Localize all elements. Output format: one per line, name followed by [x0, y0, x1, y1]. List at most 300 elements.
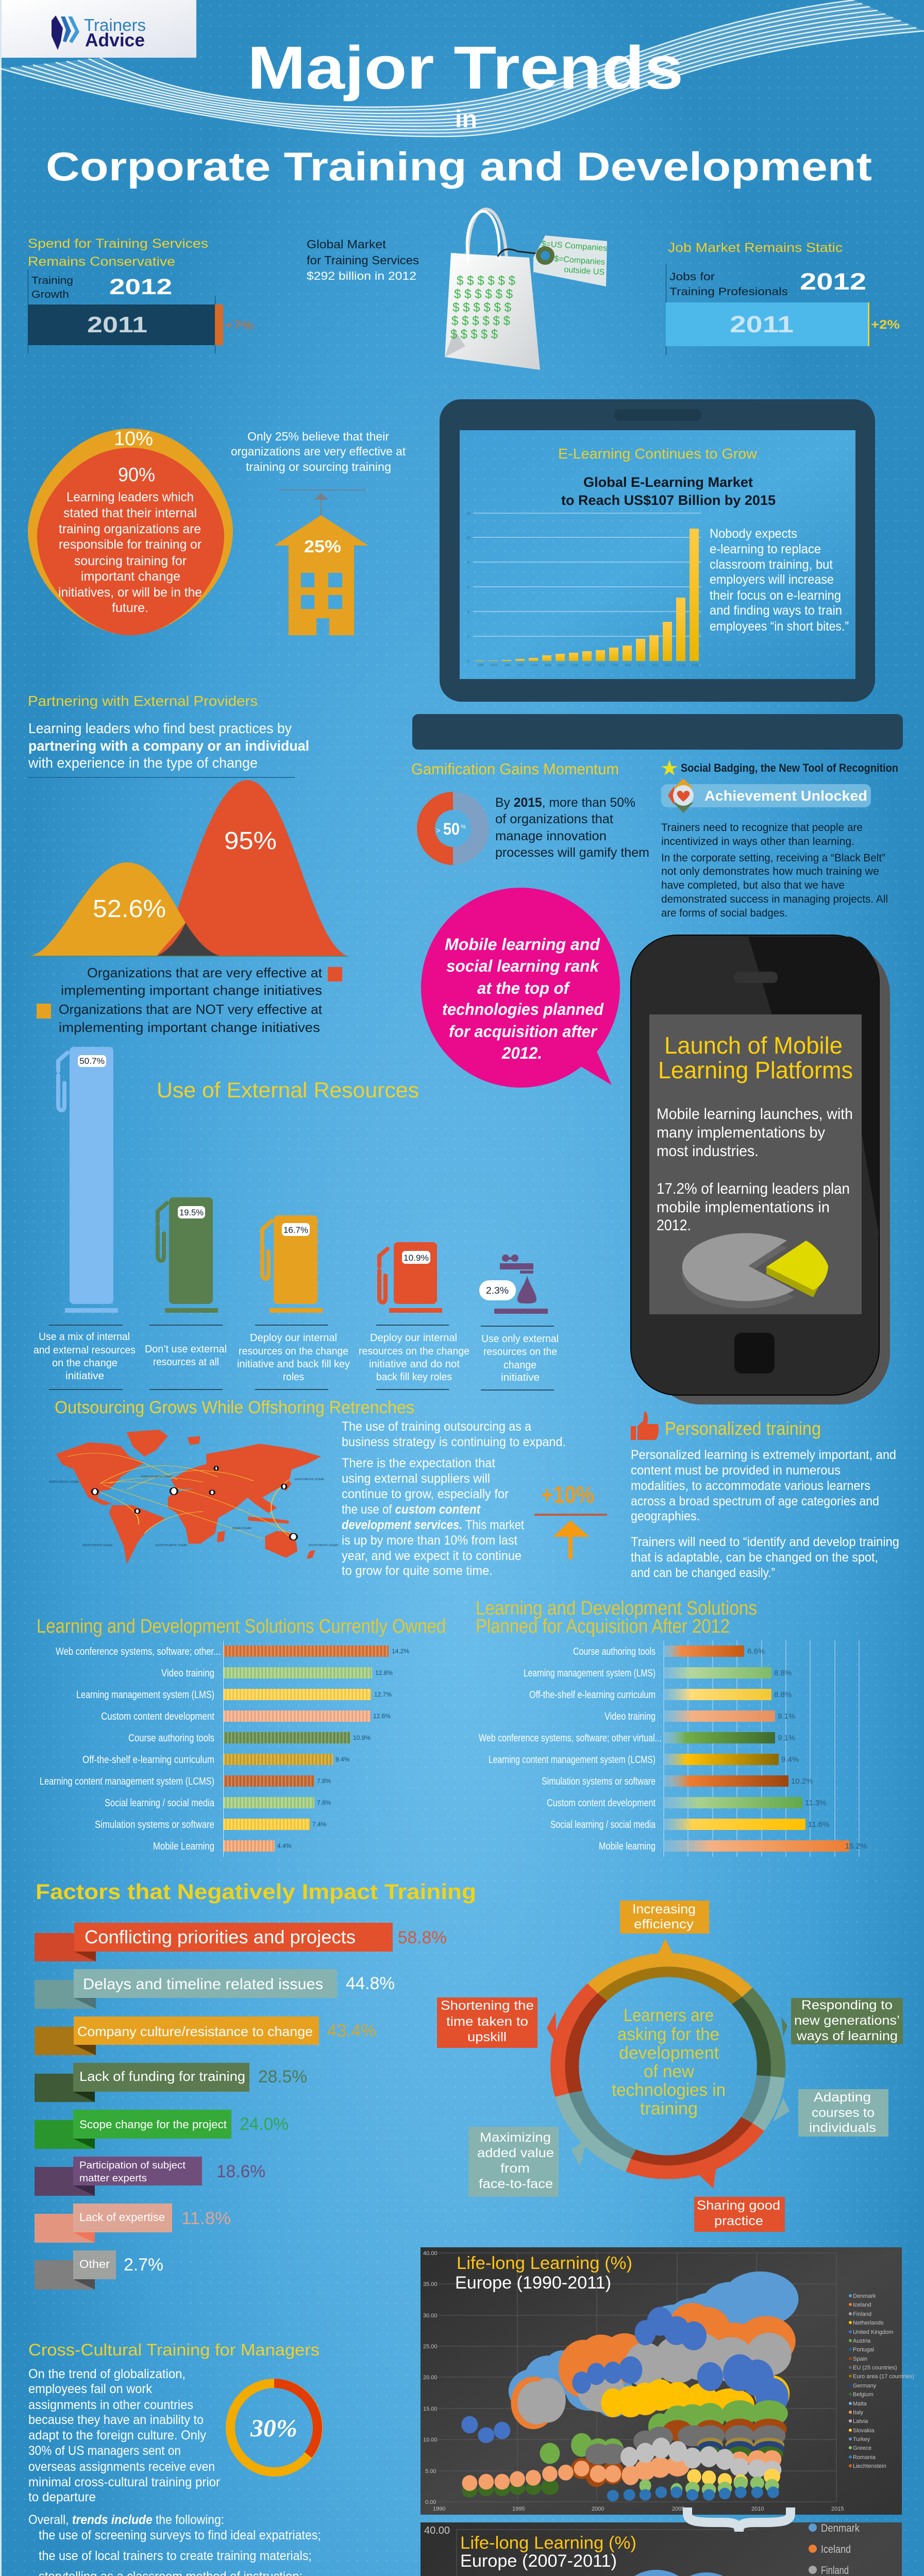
panel: factors that negatively impact training: [35, 1879, 476, 2290]
panel: tablet e-learning: [412, 399, 903, 750]
tablet text: employers will increase: [710, 572, 834, 587]
2012 label: 2012: [800, 268, 866, 295]
bar chart: 8: [467, 561, 469, 565]
bar chart: 8.8%: [774, 1690, 792, 1699]
legend: Belgium: [853, 2392, 873, 2398]
text: training or sourcing training: [246, 460, 391, 473]
icon: shopping bag: $ $ $ $ $ $: [451, 314, 510, 328]
chart title: Europe (1990-2011): [455, 2273, 611, 2293]
icon: star: [661, 760, 678, 775]
box: maximizing added value: face-to-face: [479, 2177, 553, 2191]
legend: Malta: [853, 2401, 867, 2407]
axis labels: [424, 2525, 770, 2576]
bar chart: 11.6%: [808, 1820, 829, 1829]
phone text: Mobile learning launches, with: [657, 1106, 853, 1123]
legend: Spain: [853, 2356, 867, 2362]
box: responding to new generations: ways of learning: [796, 2029, 898, 2043]
chart title: Life-long Learning (%): [460, 2533, 636, 2553]
bar chart: Mobile Learning: [153, 1841, 214, 1852]
bar chart: 12: [466, 512, 471, 516]
axis labels: 35.00: [423, 2281, 438, 2287]
icon: house: [274, 515, 368, 635]
egg text: responsible for training or: [59, 537, 201, 552]
bar chart: 12.6%: [373, 1713, 391, 1720]
label: mix of internal and external: and external resources: [33, 1345, 136, 1356]
logo wordmark: Advice: [85, 29, 145, 50]
text: Only 25% believe that their: [247, 430, 389, 443]
legend: Portugal: [853, 2347, 874, 2353]
ribbon: lack of funding: [35, 2063, 307, 2102]
axis labels: 40.00: [424, 2525, 450, 2536]
badging text: are forms of social badges.: [661, 907, 787, 919]
label: training growth: [31, 275, 73, 300]
ribbon: conflicting priorities: 58.8%: [398, 1928, 447, 1947]
phone text: 2012.: [657, 1217, 691, 1234]
bar chart: 7.4%: [312, 1821, 327, 1828]
heading: Learning and Development Solutions Currently Owned: [37, 1616, 446, 1637]
box: adapting courses: individuals: [809, 2121, 876, 2135]
tablet text: classroom training, but: [710, 557, 833, 572]
body text: assignments in other countries: [28, 2398, 193, 2412]
phone text: most industries.: [657, 1143, 759, 1160]
panel: solutions currently owned: [37, 1616, 446, 1857]
social badging heading: Social Badging, the New Tool of Recognition: [681, 761, 898, 774]
chart title: [455, 2253, 632, 2293]
trends list: [28, 2513, 323, 2576]
ribbon: lack of expertise: Lack of expertise: [79, 2211, 165, 2224]
label: deploy and do not back fill: back fill key roles: [376, 1371, 452, 1383]
icon: shopping bag: $ $ $ $ $: [450, 327, 498, 342]
bar chart: 10.9%: [353, 1734, 371, 1741]
panel: mobile phone: [631, 935, 890, 1404]
bar chart: Course authoring tools: [573, 1646, 656, 1657]
bar chart: 15.2%: [845, 1842, 867, 1851]
center text: [612, 2006, 726, 2119]
chart title: Europe (2007-2011): [460, 2551, 617, 2571]
tablet text: e-learning to replace: [710, 542, 821, 556]
jobs label: Training Profesionals: [669, 286, 788, 298]
box: increasing efficiency: efficiency: [634, 1917, 694, 1931]
trends list: the use of screening surveys to find ideal expatriates;: [39, 2528, 321, 2543]
heading: Learning and Development Solutions: [476, 1598, 757, 1619]
icon: fuel pump 10.9%: 10.9%: [404, 1253, 429, 1263]
body text: employees fail on work: [28, 2382, 152, 2396]
icon: fuel pump 10.9%: [379, 1242, 442, 1313]
title: Major Trends: [247, 34, 683, 102]
donut chart: >: [436, 826, 441, 835]
legend: Italy: [853, 2410, 864, 2416]
label: use only external: change: [503, 1360, 536, 1371]
box: responding to new generations: new generations’: [794, 2013, 900, 2028]
bar chart: 1999: [477, 664, 484, 667]
legend: Turkey: [853, 2436, 870, 2443]
text: organizations are very effective at: [231, 445, 406, 458]
chart: life-long learning Europe 1990-2011: [421, 2247, 914, 2515]
outsourcing text: to grow for quite some time.: [342, 1564, 493, 1578]
bar chart: [479, 1640, 867, 1857]
bar chart: Custom content development: [101, 1711, 214, 1722]
achievement badge: [661, 778, 871, 813]
bar chart: Off-the-shelf e-learning curriculum: [529, 1689, 656, 1701]
bar chart: 12.8%: [375, 1669, 393, 1676]
icon: water tap 2.3%: 2.3%: [486, 1285, 509, 1296]
panel: gamification: [411, 760, 898, 919]
panel: 25% house: [231, 430, 406, 635]
bar chart: 11.3%: [805, 1799, 826, 1807]
price tag: outside US: [564, 265, 605, 277]
ribbon: participation of SMEs: 18.6%: [216, 2162, 265, 2181]
gamification text: [495, 795, 649, 860]
label: training growth: Training: [31, 275, 73, 286]
label: deploy and do not back fill: [359, 1325, 469, 1390]
bar chart: 2: [467, 635, 469, 639]
panel: partnering with external providers: [28, 693, 348, 1035]
callout: speech bubble: for acquisition after: [449, 1022, 597, 1041]
text: Trainers will need to “identify and develop training: [631, 1535, 899, 1549]
icon: shopping bag: $ $ $ $ $ $: [452, 300, 511, 315]
title: [46, 34, 872, 189]
price tag: [533, 235, 608, 286]
chart: life-long learning Europe 2007-2011: [421, 2522, 902, 2576]
label: use only external: resources on the: [483, 1346, 557, 1358]
icon: fuel pump 19.5%: [158, 1197, 218, 1313]
bell curve chart: 95%: [224, 827, 277, 855]
subheading: Global E-Learning Market: [583, 474, 753, 490]
box: adapting courses: Adapting: [814, 2090, 871, 2105]
text: that is adaptable, can be changed on the spot,: [631, 1550, 878, 1565]
center text: asking for the: [617, 2025, 719, 2044]
bar chart: 6: [467, 586, 469, 589]
world map: INDIAN OCEAN: [232, 1527, 251, 1530]
bar chart: 12.7%: [374, 1691, 392, 1698]
bar chart: 7.8%: [317, 1799, 331, 1806]
legend: Netherlands: [853, 2320, 884, 2326]
growth +2%: +2%: [871, 318, 900, 332]
bar chart: 9.4%: [781, 1755, 799, 1764]
market text: [307, 238, 419, 282]
axis labels: 15.00: [423, 2406, 438, 2412]
bar chart: 8.8%: [774, 1669, 792, 1677]
icon: fuel pump 50.7%: [58, 1047, 118, 1313]
intro text: Learning leaders who find best practices by: [28, 720, 292, 736]
legend: Greece: [853, 2445, 871, 2451]
brace linking charts: [687, 2507, 791, 2532]
gamification text: processes will gamify them: [495, 845, 649, 860]
outsourcing text: development services. This market: [342, 1518, 524, 1532]
egg text: [58, 490, 202, 615]
bar chart: 2000: [491, 664, 498, 667]
box: maximizing added value: from: [500, 2161, 530, 2176]
body text: overseas assignments receive even: [28, 2460, 215, 2474]
bar chart: Learning management system (LMS): [524, 1668, 656, 1679]
legend: Romania: [853, 2454, 876, 2461]
bar chart: 2002: [517, 664, 525, 667]
donut: 30%: 30%: [250, 2415, 297, 2442]
bubbles: [461, 2272, 798, 2501]
percentages: [114, 428, 155, 486]
bar 2011: [666, 302, 869, 346]
callout: speech bubble: social learning rank: [446, 957, 600, 975]
tablet text: employees “in short bites.”: [710, 619, 849, 634]
box: shortening the time: upskill: [467, 2030, 507, 2044]
axis labels: 40.00: [423, 2250, 438, 2257]
outsourcing text: There is the expectation that: [342, 1456, 495, 1470]
arrow: [314, 493, 328, 515]
badging text: have completed, but also that we have: [661, 879, 845, 891]
icon: fuel pump 16.7%: 16.7%: [283, 1225, 308, 1235]
icon: shopping bag: $ $ $ $ $ $: [457, 274, 515, 288]
bell curve chart: 52.6%: [93, 895, 166, 923]
heading: Factors that Negatively Impact Training: [36, 1879, 476, 1904]
icon: shopping bag: [445, 209, 545, 370]
box: maximizing added value: added value: [477, 2146, 554, 2160]
bar chart: 10: [466, 536, 471, 540]
subheading: to Reach US$107 Billion by 2015: [561, 493, 776, 508]
ribbon: other: 2.7%: [124, 2255, 163, 2275]
donut chart: %: [461, 824, 466, 830]
panel: outsourcing: [49, 1398, 607, 1578]
outsourcing text: The use of training outsourcing as a: [342, 1419, 531, 1434]
bar chart: 6.6%: [747, 1647, 765, 1656]
bar chart: 2012: [651, 664, 659, 667]
market text: Global Market: [307, 238, 387, 251]
legend: Euro area (17 countries): [853, 2374, 914, 2380]
bar chart: Social learning / social media: [550, 1819, 656, 1831]
gamification text: of organizations that: [495, 812, 613, 826]
legend: Iceland: [853, 2302, 871, 2308]
ribbon: conflicting priorities: Conflicting priorities and projects: [85, 1926, 356, 1947]
world map: SOUTH PACIFIC OCEAN: [82, 1544, 112, 1547]
bar chart: Learning management system (LMS): [76, 1689, 214, 1701]
panel: 90% egg chart: [28, 428, 233, 635]
bar chart: Off-the-shelf e-learning curriculum: [82, 1754, 214, 1766]
bar chart: Video training: [161, 1668, 214, 1679]
badging text: In the corporate setting, receiving a “Black Belt”: [661, 852, 885, 864]
world map: NORTH ATLANTIC OCEAN: [141, 1476, 173, 1479]
trends list: the use of local trainers to create training materials;: [39, 2549, 312, 2563]
bar chart: 10.2%: [791, 1777, 813, 1786]
legend: Finland: [853, 2311, 871, 2317]
axis labels: 1995: [512, 2506, 525, 2512]
intro text: [28, 720, 309, 771]
ribbon: scope change: 24.0%: [240, 2114, 289, 2134]
label: deploy and do not back fill: initiative and do not: [369, 1359, 460, 1370]
bar chart: [40, 1646, 409, 1852]
bar chart: 9.4%: [335, 1756, 350, 1763]
outsourcing text: [342, 1419, 566, 1578]
callout: speech bubble: technologies planned: [442, 1000, 604, 1019]
world map: SOUTH ATLANTIC OCEAN: [155, 1544, 187, 1547]
body text: because they have an inability to: [28, 2413, 204, 2427]
legend: Liechtenstein: [853, 2463, 886, 2469]
icon: shopping bag: $ $ $ $ $ $: [454, 287, 513, 301]
panel: learners ring diagram: [437, 1901, 903, 2232]
ribbon: delays: [35, 1969, 395, 2009]
box: responding to new generations: [791, 1998, 903, 2044]
ribbon: participation of SMEs: Participation of subject: [79, 2160, 186, 2171]
body text: minimal cross-cultural training prior: [28, 2475, 220, 2489]
bell curve chart: [28, 780, 348, 957]
ribbon: scope change: [35, 2110, 289, 2149]
axis labels: 25.00: [423, 2344, 438, 2350]
egg text: future.: [112, 601, 148, 615]
egg text: training organizations are: [59, 522, 201, 536]
bar chart: 9.1%: [778, 1712, 795, 1721]
center text: training: [640, 2099, 698, 2119]
bar chart: [466, 512, 701, 667]
bar chart: 4: [467, 611, 469, 614]
bar chart: Simulation systems or software: [542, 1776, 656, 1787]
axis labels: 2000: [592, 2506, 604, 2512]
legend: Austria: [853, 2338, 871, 2344]
outsourcing text: continue to grow, especially for: [342, 1487, 509, 1501]
bar chart: 2013: [665, 664, 672, 667]
label: mix of internal and external: initiative: [65, 1370, 104, 1382]
panel: spend for training services: [28, 236, 254, 353]
ribbon: company culture: Company culture/resistance to change: [77, 2024, 313, 2039]
panel: use of external resources: [33, 1047, 559, 1391]
axis labels: 0.00: [425, 2499, 436, 2505]
bar chart: Web conference systems, software; other...: [56, 1646, 221, 1657]
box: adapting courses: [798, 2089, 888, 2137]
axis labels: 2005: [672, 2506, 684, 2512]
panel: global market: [307, 209, 608, 370]
chart title: [460, 2533, 636, 2571]
label: deploy and back fill: resources on the change: [239, 1346, 348, 1357]
egg text: stated that their internal: [63, 506, 197, 520]
outsourcing text: business strategy is continuing to expand.: [342, 1435, 566, 1449]
box: shortening the time: Shortening the: [441, 1998, 534, 2013]
market text: for Training Services: [307, 253, 419, 267]
icon: house: 25%: [304, 537, 341, 556]
heading: Job Market Remains Static: [668, 241, 843, 255]
tablet text: [710, 527, 849, 634]
center text: Learners are: [624, 2006, 714, 2025]
label: deploy and do not back fill: Deploy our internal: [370, 1332, 457, 1344]
label: deploy and back fill: [237, 1325, 350, 1390]
box: responding to new generations: Responding to: [801, 1998, 893, 2012]
badging text: not only demonstrates how much training we: [661, 866, 879, 877]
axis labels: [423, 2250, 844, 2512]
text: geographies.: [631, 1509, 700, 1523]
heading: Gamification Gains Momentum: [411, 760, 619, 778]
achievement badge: Achievement Unlocked: [704, 788, 867, 804]
body text: adapt to the foreign culture. Only: [28, 2428, 206, 2443]
egg text: important change: [81, 569, 180, 584]
label: use only external: Use only external: [481, 1333, 559, 1345]
icon: thumbs up: [631, 1412, 659, 1440]
egg text: sourcing training for: [74, 554, 187, 568]
logo panel: [2, 0, 196, 58]
logo wordmark: [84, 15, 146, 50]
legend: United Kingdom: [853, 2329, 893, 2335]
bar chart: 14.2%: [392, 1648, 409, 1655]
text: across a broad spectrum of age categories and: [631, 1494, 879, 1509]
ribbon: lack of expertise: [35, 2204, 231, 2243]
logo wordmark: Trainers: [84, 15, 146, 35]
outsourcing text: year, and we expect it to continue: [342, 1549, 522, 1563]
trends list: Overall, trends include the following:: [28, 2513, 224, 2527]
label: don't use external: resources at all: [153, 1357, 219, 1368]
icon: fuel pump 16.7%: [262, 1215, 323, 1313]
heading: Remains Conservative: [28, 255, 175, 269]
ribbon: conflicting priorities: [35, 1923, 447, 1961]
box: increasing efficiency: [620, 1901, 709, 1934]
legend: Slovakia: [853, 2428, 875, 2434]
panel: cross-cultural training: [28, 2341, 323, 2576]
heading: Partnering with External Providers: [28, 693, 258, 709]
phone text: many implementations by: [657, 1124, 825, 1141]
heading: Launch of Mobile: [664, 1032, 843, 1059]
bar 2011: 2011: [730, 311, 794, 337]
icon: water tap 2.3%: [479, 1255, 548, 1314]
box: sharing good practice: [694, 2197, 785, 2232]
bar chart: Web conference systems, software; other virtual...: [479, 1733, 662, 1744]
heading: Spend for Training Services: [28, 236, 208, 251]
market text: $292 billion in 2012: [307, 269, 416, 282]
world map: [49, 1430, 338, 1564]
axis labels: 2015: [831, 2506, 844, 2512]
growth +7%: +7%: [224, 319, 254, 332]
legend: [805, 2522, 893, 2576]
text: Personalized learning is extremely important, and: [631, 1448, 896, 1462]
axis labels: 2010: [751, 2506, 764, 2512]
heading: [658, 1032, 853, 1083]
bar chart: 4.4%: [277, 1842, 292, 1850]
gamification text: By 2015, more than 50%: [495, 795, 635, 810]
callout: speech bubble: [421, 888, 620, 1088]
bar chart: 2003: [531, 664, 538, 667]
2012 label: 2012: [109, 275, 172, 299]
ribbon: company culture: 43.4%: [327, 2021, 376, 2041]
badging text: Trainers need to recognize that people are: [661, 822, 863, 834]
box: sharing good practice: practice: [714, 2214, 763, 2228]
bar chart: 2010: [625, 664, 632, 667]
badging text: [661, 822, 888, 919]
outsourcing text: using external suppliers will: [342, 1471, 490, 1486]
legend: Organizations that are very effective at: [87, 965, 323, 980]
ribbon: lack of funding: 28.5%: [258, 2067, 307, 2087]
panel: job market: [666, 241, 900, 355]
badging text: incentivized in ways other than learning.: [661, 836, 854, 848]
jobs label: [669, 271, 788, 298]
icon: fuel pump 50.7%: 50.7%: [79, 1056, 105, 1066]
label: training growth: Growth: [31, 289, 69, 300]
bar chart: 9.1%: [778, 1734, 795, 1742]
box: shortening the time: [437, 1997, 537, 2048]
center text: of new: [644, 2062, 694, 2081]
jobs label: Jobs for: [669, 271, 715, 283]
label: use only external: [481, 1326, 559, 1391]
bar chart: Social learning / social media: [105, 1798, 215, 1809]
gamification text: manage innovation: [495, 829, 607, 843]
axis labels: 1990: [433, 2506, 445, 2512]
bar chart: Mobile learning: [599, 1841, 656, 1852]
callout: speech bubble: at the top of: [477, 979, 570, 997]
egg text: Learning leaders which: [66, 490, 194, 504]
bar chart: Video training: [604, 1711, 656, 1722]
+10% callout: [534, 1481, 607, 1559]
bar 2011: 2011: [87, 312, 147, 337]
donut chart: [417, 792, 489, 865]
bar chart: 2014: [678, 664, 685, 667]
legend: Denmark: [853, 2293, 876, 2299]
badging text: demonstrated success in managing projects. All: [661, 893, 888, 905]
label: deploy and back fill: roles: [283, 1371, 304, 1383]
center text: development: [619, 2043, 719, 2063]
box: maximizing added value: [468, 2127, 559, 2197]
percentages: 90%: [118, 464, 155, 486]
